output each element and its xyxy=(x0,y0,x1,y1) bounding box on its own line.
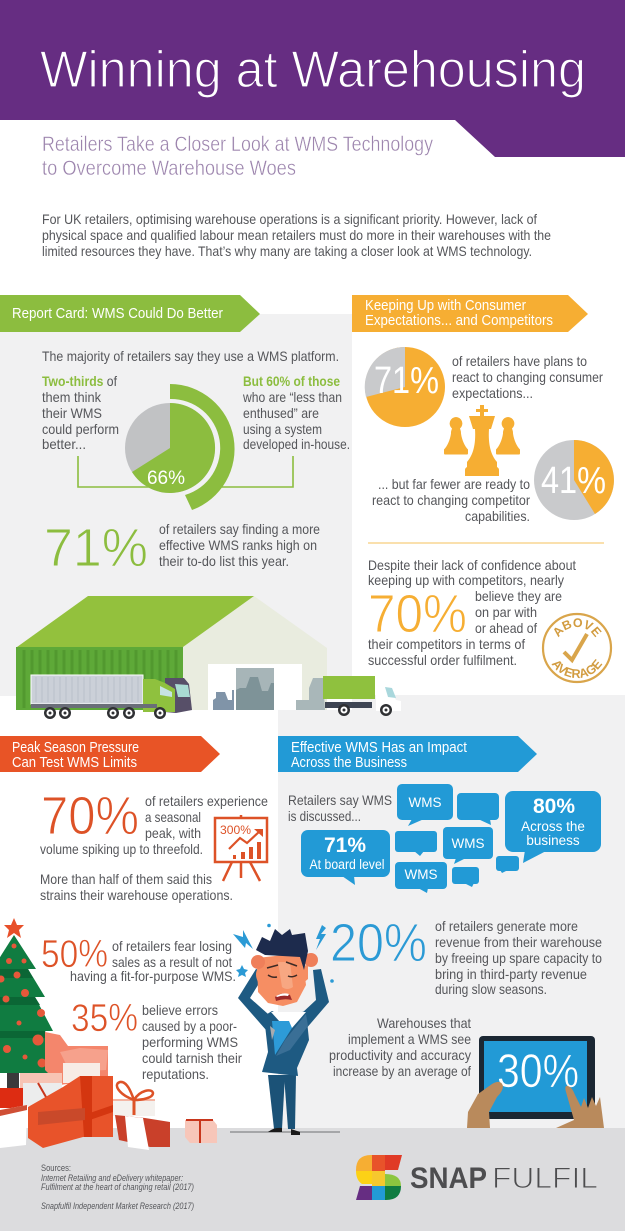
speech bubbles: WMS xyxy=(452,836,484,851)
text: plans to react: react to changing consumer xyxy=(452,369,603,385)
stat: 35 percent xyxy=(71,997,242,1082)
speech bubbles: WMS xyxy=(404,867,438,882)
icon: lightning and sparks xyxy=(233,924,334,983)
text: 60 percent of those: enthused” are xyxy=(243,405,319,421)
stat: 35 percent: performing WMS xyxy=(142,1034,238,1050)
stat: 71 percent: effective WMS ranks high on xyxy=(159,537,317,553)
heading: keeping up xyxy=(352,295,588,332)
text: plans to react: expectations... xyxy=(452,385,533,401)
illustration: christmas tree xyxy=(0,918,60,1090)
stat: 20 percent: by freeing up spare capacity to xyxy=(435,950,602,966)
header banner xyxy=(0,0,625,157)
text: far fewer: capabilities. xyxy=(465,508,530,524)
heading: report card: Report Card: WMS Could Do Better xyxy=(12,305,223,322)
stat: 20 percent: 20% xyxy=(330,913,427,973)
text: majority statement: The majority of retailers say they use a WMS platform. xyxy=(42,348,339,364)
stat: 70 percent seasonal peak: 70% xyxy=(41,786,139,846)
stat: 35 percent: caused by a poor- xyxy=(142,1018,237,1034)
text: 60 percent of those: But 60% of those xyxy=(243,373,340,389)
intro text: limited resources they have. That’s why many are taking a closer look at WMS technology. xyxy=(42,243,532,259)
heading: peak season: Can Test WMS Limits xyxy=(12,754,137,771)
footer sources: Fulfilment at the heart of changing retail (2017) xyxy=(41,1182,194,1192)
gift bow xyxy=(117,1082,153,1100)
stat: 35 percent: 35% xyxy=(71,997,138,1040)
subtitle: to Overcome Warehouse Woes xyxy=(42,157,296,180)
chart: 66 percent pie with brackets xyxy=(78,384,293,510)
stat: 71 percent: their to-do list this year. xyxy=(159,553,289,569)
heading: peak season: Peak Season Pressure xyxy=(12,739,139,756)
truck: small xyxy=(323,676,401,716)
stat: 20 percent: revenue from their warehouse xyxy=(435,934,602,950)
text: warehouses that implement WMS: increase by an average of xyxy=(333,1063,471,1079)
icon: presentation board 300 percent: 300% xyxy=(220,825,251,837)
title: Winning at Warehousing xyxy=(40,41,586,99)
stat: 70 percent on par: believe they are xyxy=(475,588,562,604)
stat: 70 percent seasonal peak: a seasonal xyxy=(145,809,201,825)
bubble: 80 percent across the business xyxy=(521,795,585,848)
truck: large xyxy=(31,675,192,719)
stat: 50 percent: sales as a result of not xyxy=(112,954,232,970)
stat: 50 percent xyxy=(41,933,236,984)
footer background xyxy=(0,1128,625,1231)
stat: 50 percent: of retailers fear losing xyxy=(112,938,232,954)
stat: 20 percent: of retailers generate more xyxy=(435,918,578,934)
heading: peak season xyxy=(0,736,220,772)
heading: effective WMS: Effective WMS Has an Impact xyxy=(291,739,468,756)
bubble: 80 percent across the business: Across the xyxy=(521,819,585,834)
text: 60 percent of those: using a system xyxy=(243,421,322,437)
intro text xyxy=(42,211,551,259)
stat: 70 percent seasonal peak: strains their warehouse operations. xyxy=(40,887,233,903)
stat: 71 percent: of retailers say finding a more xyxy=(159,521,320,537)
stat: 70 percent on par: 70% xyxy=(368,584,467,644)
text: 60 percent of those xyxy=(242,373,350,452)
text: far fewer: react to changing competitor xyxy=(372,492,530,508)
logo: SnapFulfil xyxy=(356,1155,598,1200)
bubble: 71 percent at board level xyxy=(310,834,384,872)
text: two-thirds: their WMS xyxy=(42,405,102,421)
forklift xyxy=(213,690,234,710)
stat: 70 percent on par: their competitors in terms of xyxy=(368,636,525,652)
heading: effective WMS: Across the Business xyxy=(291,754,407,771)
stat: 35 percent: could tarnish their xyxy=(142,1050,242,1066)
illustration: stressed man xyxy=(230,924,340,1135)
intro text: For UK retailers, optimising warehouse operations is a significant priority. However, lack of xyxy=(42,211,537,227)
text: WMS is discussed xyxy=(288,792,392,824)
stat: 71 percent xyxy=(44,518,320,578)
stat: 70 percent on par: on par with xyxy=(475,604,537,620)
stat: 20 percent: bring in third-party revenue xyxy=(435,966,587,982)
bubble: 80 percent across the business: business xyxy=(526,833,580,848)
stat: 70 percent on par: keeping up with competitors, nearly xyxy=(368,572,564,588)
stat: 70 percent seasonal peak: peak, with xyxy=(145,825,201,841)
text: plans to react: of retailers have plans to xyxy=(452,353,587,369)
icon: logo mark xyxy=(356,1155,402,1200)
icon: chess pieces xyxy=(444,405,520,476)
chart: 41 percent pie: 41% xyxy=(541,460,606,502)
stat: 20 percent xyxy=(330,913,602,997)
footer sources: Internet Retailing and eDelivery whitepaper: xyxy=(41,1173,183,1183)
text: warehouses that implement WMS: implement a WMS see xyxy=(348,1031,471,1047)
subtitle: Retailers Take a Closer Look at WMS Technology xyxy=(42,133,433,156)
illustration: gift boxes xyxy=(0,1032,217,1150)
icon: tablet with hands 30 percent xyxy=(467,1036,604,1128)
panel: effective WMS xyxy=(278,736,604,1128)
speech bubbles: WMS xyxy=(408,795,442,810)
footer sources: Snapfulfil Independent Market Research (2017) xyxy=(41,1201,194,1211)
text: warehouses that implement WMS: productivity and accuracy xyxy=(329,1047,471,1063)
stat: 70 percent seasonal peak: of retailers experience xyxy=(145,793,268,809)
bubble: 71 percent at board level: At board level xyxy=(310,857,384,872)
chart: 41 percent pie xyxy=(534,440,614,520)
text: two-thirds: them think xyxy=(42,389,102,405)
chart: 66 percent pie with brackets: 66% xyxy=(147,468,185,489)
heading: report card xyxy=(0,295,260,332)
icon: presentation board 300 percent xyxy=(215,815,267,881)
footer sources: Sources: xyxy=(41,1163,71,1173)
stat: 35 percent: reputations. xyxy=(142,1066,209,1082)
bubble: 71 percent at board level: 71% xyxy=(324,834,366,857)
icon: above average stamp: ABOVE xyxy=(554,618,602,638)
text: 60 percent of those: developed in-house. xyxy=(243,436,350,452)
text: two-thirds: Two-thirds of xyxy=(42,373,117,389)
stat: 70 percent on par: or ahead of xyxy=(475,620,537,636)
text: far fewer xyxy=(372,476,530,524)
stat: 20 percent: during slow seasons. xyxy=(435,981,547,997)
logo wordmark: SNAP xyxy=(410,1162,487,1195)
logo wordmark xyxy=(410,1162,598,1195)
panel: report card xyxy=(0,295,350,578)
text: two-thirds xyxy=(42,373,119,452)
text: far fewer: ... but far fewer are ready to xyxy=(378,476,530,492)
stat: 50 percent: 50% xyxy=(41,933,108,976)
footer sources xyxy=(41,1163,194,1211)
text: WMS is discussed: Retailers say WMS xyxy=(288,792,392,808)
icon: above average stamp: AVERAGE xyxy=(552,659,602,678)
stat: 70 percent on par xyxy=(368,557,576,668)
text: 60 percent of those: who are “less than xyxy=(242,389,342,405)
illustration: warehouse and trucks xyxy=(16,596,401,719)
panel: peak season xyxy=(0,736,268,1082)
subtitle xyxy=(42,133,433,180)
stat: 70 percent seasonal peak: volume spiking up to threefold. xyxy=(40,841,203,857)
stat: 70 percent on par: Despite their lack of confidence about xyxy=(368,557,576,573)
heading: keeping up: Keeping Up with Consumer xyxy=(365,297,526,314)
stat: 70 percent seasonal peak: More than half of them said this xyxy=(40,871,212,887)
stat: 70 percent on par: successful order fulfilment. xyxy=(368,652,517,668)
bubble: 80 percent across the business: 80% xyxy=(533,795,575,818)
text: two-thirds: better... xyxy=(42,436,86,452)
text: warehouses that implement WMS: Warehouses that xyxy=(377,1015,471,1031)
text: two-thirds: could perform xyxy=(42,421,119,437)
chart: 71 percent pie xyxy=(365,347,445,427)
icon: above average stamp xyxy=(542,612,612,684)
stat: 35 percent: believe errors xyxy=(142,1002,218,1018)
intro text: physical space and qualified labour mean retailers must do more in their warehouses with the xyxy=(42,227,551,243)
heading: effective WMS xyxy=(278,736,537,772)
heading: keeping up: Expectations... and Competitors xyxy=(365,312,553,329)
speech bubbles xyxy=(301,784,601,893)
icon: tablet with hands 30 percent: 30% xyxy=(497,1044,579,1097)
stat: 50 percent: having a fit-for-purpose WMS. xyxy=(70,968,236,984)
stat: 71 percent: 71% xyxy=(44,518,148,578)
text: warehouses that implement WMS xyxy=(329,1015,471,1079)
text: plans to react xyxy=(452,353,603,401)
panel: consumer expectations xyxy=(352,295,614,684)
logo wordmark: FULFIL xyxy=(492,1162,598,1195)
text: WMS is discussed: is discussed... xyxy=(288,808,361,824)
stat: 70 percent seasonal peak xyxy=(40,786,268,903)
chart: 71 percent pie: 71% xyxy=(374,360,439,402)
